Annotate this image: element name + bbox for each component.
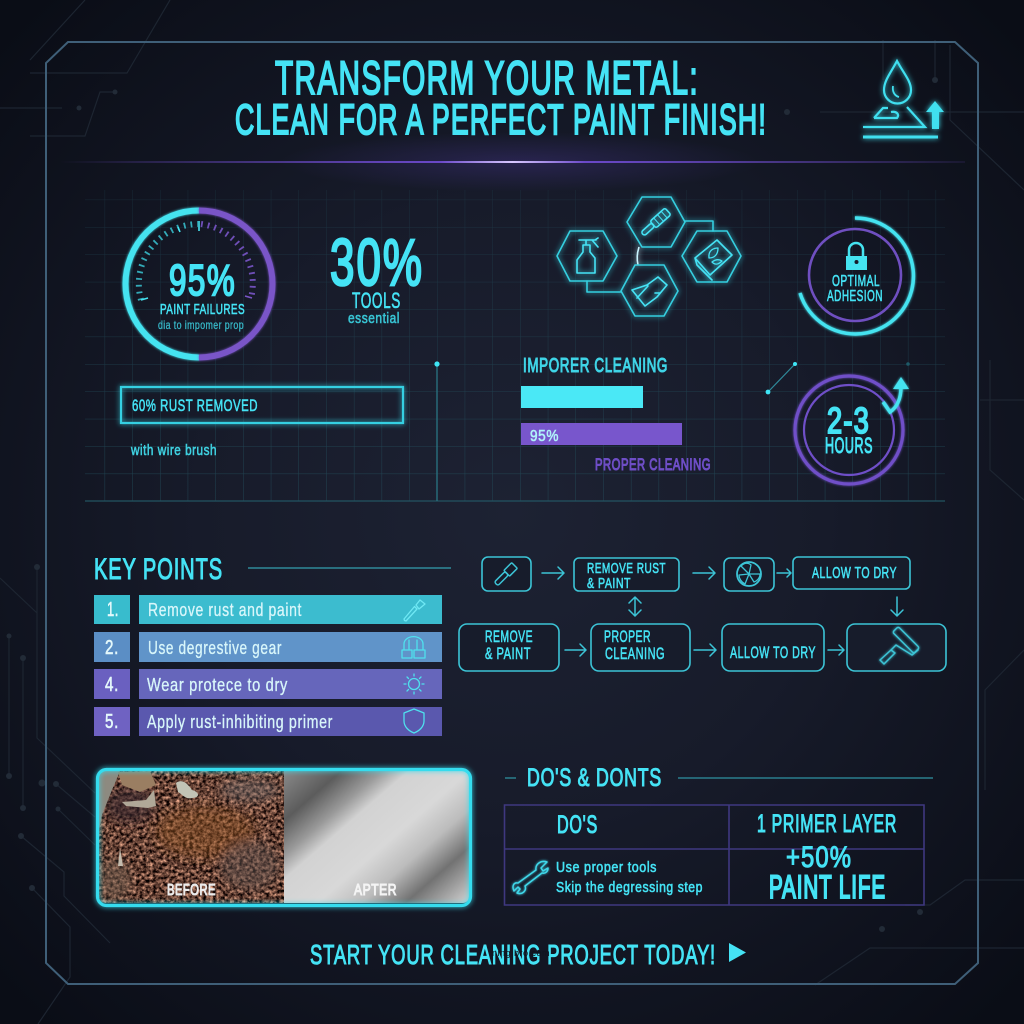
panel: key points list — [94, 595, 442, 736]
comparison bars: PROPER CLEANING — [595, 455, 711, 474]
photo frame — [98, 770, 470, 906]
gauge value: 95% — [169, 256, 236, 305]
stat: 30% tools essential — [330, 225, 424, 327]
hex tool network — [557, 197, 741, 316]
title: TRANSFORM YOUR METAL: — [275, 51, 699, 104]
item 3: 4. — [105, 674, 119, 696]
item 1: 1. — [107, 599, 119, 621]
step: proper cleaning: CLEANING — [605, 644, 665, 663]
call to action: ning bro.com — [492, 948, 550, 958]
gauge: 95% paint failures — [126, 210, 273, 358]
stat: 30% tools essential: TOOLS — [352, 288, 401, 313]
icon: spray bottle — [557, 231, 617, 281]
grid panel background — [85, 190, 945, 501]
item 2 — [94, 632, 442, 662]
step: allow to dry 2 — [722, 624, 824, 671]
step: fan icon — [724, 558, 774, 591]
step: paint roller — [847, 624, 946, 671]
icon: play arrow — [729, 943, 746, 962]
arrow — [694, 644, 716, 656]
item 1 — [94, 595, 442, 624]
step: remove rust: & PAINT — [587, 575, 631, 592]
step: remove and paint — [459, 624, 559, 671]
item 2: Use degrestive gear — [148, 638, 282, 658]
step: remove and paint: REMOVE — [485, 627, 533, 646]
optimal adhesion badge: ADHESION — [827, 288, 883, 305]
icon: wrench — [513, 861, 548, 894]
arrow — [693, 567, 715, 579]
comparison bars: IMPORER CLEANING — [523, 355, 668, 377]
arrow — [565, 644, 586, 656]
do's and donts heading: DO'S & DONTS — [527, 764, 662, 792]
step: brush icon — [482, 557, 531, 591]
icon: brush — [627, 197, 685, 247]
optimal adhesion badge: OPTIMAL — [832, 273, 880, 290]
do's and donts table: 1 PRIMER LAYER — [757, 810, 897, 838]
after label: APTER — [354, 882, 397, 899]
highlight between hexes — [637, 247, 639, 265]
rust removed bar — [121, 387, 403, 423]
step: allow to dry 2: ALLOW TO DRY — [730, 643, 816, 662]
icon: lock — [846, 243, 867, 270]
title — [235, 51, 767, 144]
arrow — [777, 569, 791, 577]
item 3 — [94, 669, 442, 699]
arrow — [542, 567, 564, 579]
gauge sublabel: dia to impomer prop — [158, 318, 244, 332]
arrow — [828, 645, 844, 655]
rust removed bar: 60% RUST REMOVED — [132, 396, 258, 415]
do's and donts table: DO'S — [557, 811, 598, 839]
icon: scraper — [621, 265, 678, 316]
item 4: Apply rust-inhibiting primer — [147, 712, 333, 732]
optimal adhesion badge — [800, 218, 913, 334]
gauge label: PAINT FAILURES — [160, 301, 245, 318]
step: allow to dry — [793, 557, 910, 589]
node accent — [766, 362, 910, 394]
call to action: START YOUR CLEANING PROJECT TODAY! — [310, 939, 716, 970]
divider glow — [60, 132, 965, 192]
comparison bars — [521, 355, 711, 474]
icon: cycle arrow — [883, 377, 909, 412]
down arrow — [891, 597, 903, 616]
wire brush note: with wire brush — [130, 442, 217, 459]
after: brushed metal — [284, 771, 469, 903]
comparison bars: 95% — [530, 428, 559, 445]
icon: cloth — [682, 231, 741, 282]
before and after photo — [98, 770, 470, 906]
before label: BEFORE — [167, 882, 216, 899]
step: proper cleaning: PROPER — [604, 627, 651, 646]
step: allow to dry: ALLOW TO DRY — [812, 565, 897, 582]
step: remove rust — [574, 558, 679, 592]
step: remove rust: REMOVE RUST — [587, 560, 666, 577]
before: rust texture — [99, 771, 285, 903]
double arrow — [629, 597, 641, 616]
stat: 30% tools essential: essential — [348, 310, 400, 327]
do's and donts table: PAINT LIFE — [769, 869, 886, 905]
gauge ticks — [139, 221, 253, 300]
step: remove and paint: & PAINT — [485, 644, 531, 663]
item 3: Wear protece to dry — [147, 675, 288, 695]
2-3 hours badge: HOURS — [825, 433, 873, 458]
2-3 hours badge — [795, 376, 909, 484]
do's and donts table: Skip the degressing step — [556, 879, 703, 896]
step: proper cleaning — [591, 624, 690, 671]
2-3 hours badge: 2-3 — [827, 400, 870, 441]
item 2: 2. — [105, 637, 119, 659]
item 4: 5. — [105, 711, 119, 733]
item 1: Remove rust and paint — [148, 600, 302, 620]
do's and donts table: +50% — [786, 841, 852, 874]
flow chart — [459, 557, 946, 671]
stat: 30% tools essential: 30% — [330, 225, 424, 299]
do's and donts table: Use proper tools — [556, 859, 657, 876]
connectors — [587, 221, 713, 292]
key points heading: KEY POINTS — [94, 553, 223, 586]
item 4 — [94, 707, 442, 736]
icon: water drop on surface with up arrow — [863, 61, 944, 137]
do's and donts table — [504, 805, 924, 905]
